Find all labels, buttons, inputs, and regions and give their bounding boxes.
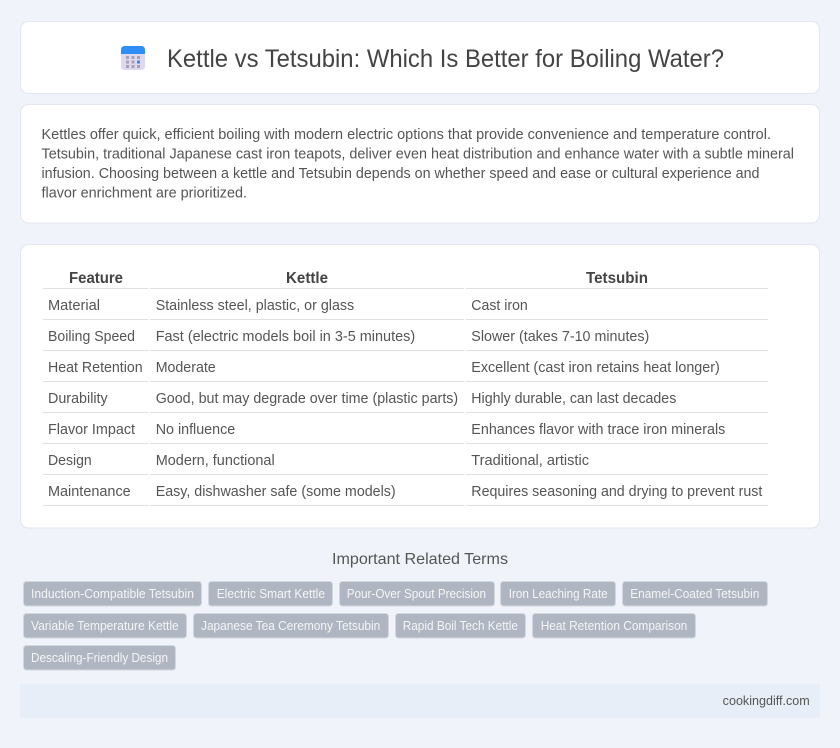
row: design <box>48 453 589 469</box>
intro paragraph <box>42 127 794 202</box>
row: boiling speed: Fast (electric models boil in 3-5 minutes) <box>156 329 415 345</box>
tag <box>24 582 202 606</box>
tag: Enamel-Coated Tetsubin <box>630 587 759 601</box>
row: durability: Highly durable, can last decades <box>471 391 676 407</box>
tag: Descaling-Friendly Design <box>31 651 168 665</box>
tag: Japanese Tea Ceremony Tetsubin <box>201 619 380 633</box>
tag <box>396 614 526 638</box>
tag <box>24 614 186 638</box>
row: flavor impact: Flavor Impact <box>48 422 135 438</box>
row: boiling speed: Boiling Speed <box>48 329 135 345</box>
tag <box>340 582 494 606</box>
tag <box>622 582 768 606</box>
tag: Iron Leaching Rate <box>509 587 608 601</box>
tag: Variable Temperature Kettle <box>31 619 179 633</box>
footer <box>20 684 820 718</box>
row: material: Stainless steel, plastic, or glass <box>156 298 354 314</box>
row: heat retention: Heat Retention <box>48 360 143 376</box>
row: material: Cast iron <box>471 298 528 314</box>
intro paragraph: flavor enrichment are prioritized. <box>42 186 247 202</box>
panel: introduction <box>20 104 820 223</box>
row: durability <box>48 391 676 407</box>
tag <box>194 614 388 638</box>
tag <box>500 582 616 606</box>
row: flavor impact: No influence <box>156 422 235 438</box>
row: boiling speed <box>48 329 649 345</box>
intro paragraph: infusion. Choosing between a kettle and Tetsubin depends on whether speed and ease or cultural experience and <box>42 166 760 182</box>
tag <box>208 582 332 606</box>
related term tags <box>24 582 768 670</box>
row: design: Traditional, artistic <box>471 453 589 469</box>
table header row: Kettle <box>286 270 328 287</box>
table header row <box>69 270 648 287</box>
tag <box>532 614 696 638</box>
row: maintenance: Maintenance <box>48 484 131 500</box>
tag: Heat Retention Comparison <box>541 619 687 633</box>
tag: Pour-Over Spout Precision <box>347 587 486 601</box>
tag: Electric Smart Kettle <box>217 587 325 601</box>
intro paragraph: Tetsubin, traditional Japanese cast iron teapots, deliver even heat distribution and enhance water with a subtle mineral <box>42 146 794 162</box>
title: Kettle vs Tetsubin: Which Is Better for Boiling Water? <box>167 45 724 73</box>
footer: cookingdiff.com <box>723 694 810 708</box>
tag: Induction-Compatible Tetsubin <box>31 587 194 601</box>
row: heat retention: Moderate <box>156 360 216 376</box>
row: maintenance <box>48 484 762 500</box>
tag: Rapid Boil Tech Kettle <box>403 619 518 633</box>
table header row: Feature <box>69 270 123 287</box>
heading: related terms: Important Related Terms <box>332 551 508 568</box>
icon: calendar <box>121 46 145 70</box>
row: design: Design <box>48 453 92 469</box>
row: durability: Durability <box>48 391 108 407</box>
row: heat retention: Excellent (cast iron retains heat longer) <box>471 360 720 376</box>
row: design: Modern, functional <box>156 453 275 469</box>
intro paragraph: Kettles offer quick, efficient boiling with modern electric options that provide convenience and temperature control. <box>42 127 771 143</box>
row: maintenance: Easy, dishwasher safe (some models) <box>156 484 396 500</box>
header panel <box>20 22 820 94</box>
row: material: Material <box>48 298 100 314</box>
row: heat retention <box>48 360 720 376</box>
row: flavor impact: Enhances flavor with trace iron minerals <box>471 422 725 438</box>
panel: comparison table <box>20 244 820 528</box>
row: material <box>48 298 528 314</box>
row: durability: Good, but may degrade over time (plastic parts) <box>156 391 458 407</box>
row: flavor impact <box>48 422 725 438</box>
table header row: Tetsubin <box>586 270 648 287</box>
row: maintenance: Requires seasoning and drying to prevent rust <box>471 484 762 500</box>
row: boiling speed: Slower (takes 7-10 minutes) <box>471 329 649 345</box>
tag <box>24 646 176 670</box>
